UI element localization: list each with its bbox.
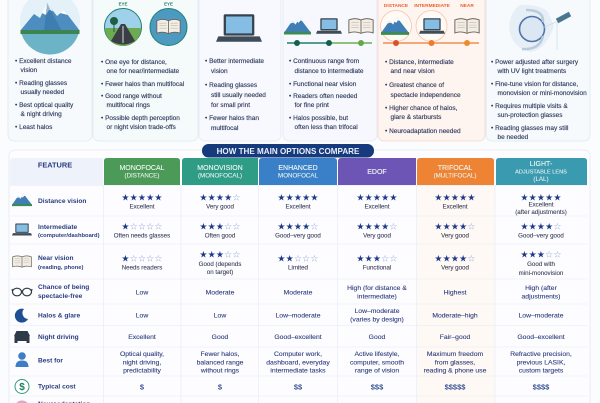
header: enhanced monofocal: ENHANCED	[278, 165, 318, 172]
text: trifocal bullets	[385, 59, 461, 135]
values: High (after	[525, 285, 558, 292]
row label: Night driving	[38, 334, 79, 341]
values: Fewer halos,	[201, 351, 240, 358]
values: $	[218, 382, 223, 392]
text: LAL bullets: • Fine-tune vision for distance,	[491, 81, 578, 88]
ratings: ★★★★☆	[277, 222, 319, 232]
icon: brain	[16, 400, 28, 403]
values	[120, 351, 572, 374]
text: EDOF bullets: for fine print	[294, 102, 329, 109]
ratings	[114, 222, 564, 240]
panel: EDOF	[283, 0, 377, 141]
ratings	[121, 250, 564, 277]
text: monofocal bullets: • Best optical quality	[15, 102, 74, 109]
row label: Distance vision	[38, 198, 86, 205]
values: Good	[212, 334, 229, 341]
values: Good–excellent	[274, 334, 322, 341]
text: LAL bullets: sun-protection glasses	[498, 112, 563, 119]
text: monovision bullets: • One eye for distance,	[101, 59, 167, 66]
label: intermediate: INTERMEDIATE	[414, 3, 451, 9]
panel: light-adjustable lens	[486, 0, 590, 141]
header: feature	[10, 158, 103, 185]
values: balanced range	[197, 360, 244, 366]
text: LAL bullets: be needed	[498, 134, 529, 141]
header: enhanced monofocal	[259, 158, 337, 185]
icon: dollar	[15, 380, 29, 394]
text: EDOF bullets: • Continuous range from	[289, 58, 359, 65]
text: enhanced bullets: still usually needed	[211, 92, 266, 99]
ratings: Good (depends	[199, 261, 241, 268]
values: intermediate)	[357, 294, 397, 300]
header: enhanced monofocal: MONOFOCAL	[278, 172, 318, 180]
header: EDOF: EDOF	[367, 169, 387, 176]
values: reading & phone use	[424, 368, 487, 374]
text: monofocal bullets: vision	[20, 67, 38, 74]
header: light-adjustable: LIGHT-	[530, 161, 553, 168]
text: monofocal bullets: & night driving	[20, 111, 62, 118]
values: $$$$$	[445, 382, 466, 392]
icon: book	[349, 19, 373, 33]
ratings: ★★★★★	[356, 194, 398, 204]
text: enhanced bullets: • Reading glasses	[205, 82, 258, 89]
header: feature: FEATURE	[38, 160, 72, 170]
values: Low–moderate	[355, 308, 400, 315]
header: monofocal: (DISTANCE)	[125, 172, 159, 180]
values: Moderate	[284, 290, 313, 296]
ratings: ★★★★★	[121, 194, 163, 204]
range line	[287, 40, 372, 46]
panel: comparison table	[9, 144, 590, 403]
icon: moon	[15, 309, 28, 323]
header: light-adjustable	[496, 158, 587, 185]
row label: Near vision	[38, 255, 74, 262]
row label: Best for	[38, 358, 63, 364]
ratings: Limited	[288, 264, 309, 272]
text: enhanced bullets: • Better intermediate	[205, 58, 264, 65]
text: LAL bullets: monovision or mini-monovision	[498, 90, 587, 97]
text: EDOF bullets: • Readers often needed	[289, 93, 358, 100]
ratings: mini-monovision	[519, 270, 564, 277]
row label: Intermediate	[38, 224, 78, 231]
text: LAL bullets	[491, 59, 587, 141]
row: best for	[16, 351, 572, 374]
ratings: Excellent	[364, 204, 390, 210]
values: (varies by design)	[350, 316, 404, 324]
ratings: Very good	[441, 264, 469, 272]
ratings: on target)	[207, 269, 233, 276]
icon: open book	[150, 8, 187, 46]
values: Refractive precision,	[510, 351, 572, 358]
label: eye right: EYE	[164, 2, 173, 6]
values: Low	[136, 312, 148, 320]
row label: (reading, phone)	[38, 265, 83, 271]
values	[140, 382, 550, 392]
ratings: Excellent	[442, 204, 468, 210]
ratings: ★★★★☆	[434, 254, 476, 264]
text: monovision bullets: multifocal rings	[106, 102, 151, 109]
values: Moderate	[206, 290, 235, 296]
ratings: ★☆☆☆☆	[121, 254, 163, 264]
row label	[38, 224, 100, 239]
icon: mountain in ring	[380, 10, 412, 42]
values: intermediate tasks	[270, 368, 326, 374]
text: EDOF bullets	[289, 58, 364, 131]
row: near vision	[13, 250, 564, 277]
row: typical cost	[15, 380, 550, 394]
values: Low–moderate	[276, 312, 321, 320]
values: Low	[214, 312, 226, 320]
ratings: Good–very good	[275, 232, 321, 240]
icon: glasses	[12, 288, 32, 296]
ratings: ★★☆☆☆	[277, 254, 319, 264]
values: range of vision	[355, 368, 399, 374]
text: enhanced bullets: vision	[211, 68, 228, 75]
ratings	[121, 194, 567, 216]
values: Highest	[443, 290, 467, 296]
ratings: ★☆☆☆☆	[121, 222, 163, 232]
label: distance: DISTANCE	[384, 3, 409, 9]
values: predictability	[123, 368, 161, 374]
row label: Chance of being	[38, 284, 89, 291]
text: monofocal bullets: usually needed	[20, 89, 65, 96]
values: $$$$	[533, 382, 550, 392]
icon: lens and UV light	[509, 5, 570, 52]
text: monovision bullets: • Good range without	[101, 93, 162, 100]
icon: mountain	[284, 17, 311, 34]
ratings: ★★★★★	[520, 194, 562, 204]
values: from glasses,	[435, 360, 475, 366]
label: eye left: EYE	[119, 2, 127, 6]
text: LAL bullets: • Power adjusted after surgery	[491, 59, 579, 66]
values: Low	[136, 290, 148, 296]
row label	[38, 255, 83, 271]
row label: spectacle-free	[38, 293, 83, 300]
values: Good–excellent	[517, 334, 565, 341]
row label: Typical cost	[38, 384, 76, 390]
text: monovision bullets: • Possible depth perception	[101, 115, 180, 122]
row label: (computer/dashboard)	[38, 233, 100, 239]
range line	[383, 40, 479, 46]
ratings: Very good	[441, 232, 469, 240]
text: trifocal bullets: glare & starbursts	[390, 114, 442, 121]
text: trifocal bullets: and near vision	[390, 68, 435, 75]
ratings: ★★★★★	[277, 194, 319, 204]
text: enhanced bullets: for small print	[211, 102, 250, 109]
text: enhanced bullets: multifocal	[211, 125, 239, 132]
ratings: (after adjustments)	[515, 209, 567, 216]
values: Optical quality,	[120, 351, 164, 358]
values: Computer work,	[274, 351, 322, 358]
label: near: NEAR	[460, 3, 474, 9]
text: trifocal bullets: • Greatest chance of	[385, 82, 444, 89]
text: monofocal bullets: • Reading glasses	[15, 80, 68, 87]
row label	[38, 284, 89, 300]
text: EDOF bullets: often less than trifocal	[294, 124, 358, 131]
text: LAL bullets: • Requires multiple visits &	[491, 103, 568, 110]
header: trifocal	[417, 158, 494, 185]
values	[128, 334, 565, 341]
icon: car	[14, 331, 30, 343]
text: monovision bullets: or night vision trade-offs	[106, 124, 176, 131]
ratings: Excellent	[285, 204, 311, 210]
text: enhanced bullets: • Fewer halos than	[205, 115, 259, 122]
icon: laptop	[12, 224, 32, 236]
icon: laptop in ring	[416, 10, 447, 42]
values: Fair–good	[440, 334, 471, 341]
header: light-adjustable: (LAL)	[533, 176, 549, 183]
ratings: Good–very good	[518, 232, 564, 240]
values: Moderate–high	[432, 312, 478, 320]
values: previous LASIK,	[517, 360, 565, 366]
ratings: Excellent	[528, 202, 554, 208]
values	[136, 285, 560, 300]
row label: Halos & glare	[38, 312, 80, 320]
ratings: ★★★★☆	[434, 222, 476, 232]
text: trifocal bullets: • Distance, intermediate	[385, 59, 454, 66]
values: dashboard, everyday	[266, 360, 330, 366]
header: monofocal	[104, 158, 180, 185]
row: distance vision	[12, 194, 567, 216]
icon: laptop	[216, 14, 262, 42]
text: trifocal bullets: spectacle independence	[390, 92, 461, 99]
title banner	[202, 144, 374, 158]
header: monovision: MONOVISION	[197, 165, 243, 172]
text: monovision bullets: • Fewer halos than multifocal	[101, 81, 185, 88]
row: neuroadaptation	[16, 400, 90, 403]
ratings: Often good	[205, 232, 236, 240]
ratings: ★★★☆☆	[520, 250, 562, 260]
panel: enhanced monofocal	[199, 0, 281, 141]
icon: mountain lake	[20, 0, 80, 55]
panel: trifocal	[378, 0, 485, 141]
icon: book	[455, 19, 479, 33]
ratings: Excellent	[129, 204, 155, 210]
header: EDOF	[338, 158, 416, 185]
ratings: Very good	[363, 232, 391, 240]
grid	[10, 185, 587, 403]
row: halos and glare	[15, 308, 564, 324]
panel: monovision	[93, 0, 198, 141]
text: trifocal bullets: • Neuroadaptation needed	[385, 128, 461, 135]
text: EDOF bullets: distance to intermediate	[294, 68, 364, 75]
values: $$$	[371, 382, 384, 392]
text: monovision bullets: one for near/intermediate	[106, 68, 180, 75]
values: computer, smooth	[350, 360, 404, 366]
ratings: Needs readers	[122, 264, 162, 272]
values: Good	[369, 334, 386, 341]
ratings: Functional	[363, 264, 391, 272]
header: trifocal: (MULTIFOCAL)	[434, 172, 476, 180]
values: custom targets	[519, 368, 564, 374]
icon: road	[104, 8, 142, 46]
row: intermediate	[12, 222, 564, 240]
values: without rings	[200, 368, 240, 374]
ratings: Very good	[206, 204, 234, 210]
ratings: ★★★☆☆	[199, 250, 241, 260]
ratings: ★★★★☆	[199, 194, 241, 204]
header: monovision	[182, 158, 258, 185]
text: LAL bullets: • Reading glasses may still	[491, 125, 569, 132]
text: EDOF bullets: • Functional near vision	[289, 81, 357, 88]
text: EDOF bullets: • Halos possible, but	[289, 115, 348, 122]
ratings: ★★★★★	[434, 194, 476, 204]
text: monofocal bullets	[15, 58, 74, 131]
row: night driving	[14, 331, 565, 343]
header: light-adjustable: ADJUSTABLE LENS	[515, 170, 567, 176]
icon: person	[16, 352, 28, 367]
ratings: Good with	[527, 261, 555, 268]
values: $$	[294, 382, 303, 392]
panel: monofocal	[8, 0, 92, 141]
ratings: Often needs glasses	[114, 232, 170, 240]
row: spectacle-free	[12, 284, 560, 300]
ratings: ★★★★☆	[520, 222, 562, 232]
values: Maximum freedom	[427, 351, 483, 358]
title banner: HOW THE MAIN OPTIONS COMPARE	[217, 147, 360, 156]
values	[136, 308, 564, 324]
trifocal column tint	[417, 185, 495, 403]
icon: mountain	[12, 194, 32, 206]
values: Excellent	[128, 334, 156, 341]
text: monovision bullets	[101, 59, 185, 131]
ratings: ★★★★☆	[356, 222, 398, 232]
text: LAL bullets: with UV light treatments	[496, 68, 567, 75]
text: monofocal bullets: • Least halos	[15, 124, 53, 131]
ratings: ★★★☆☆	[199, 222, 241, 232]
header: trifocal: TRIFOCAL	[438, 165, 472, 172]
values: High (for distance &	[347, 285, 407, 292]
values: Low–moderate	[519, 312, 564, 320]
values: night driving,	[123, 360, 161, 366]
text: monofocal bullets: • Excellent distance	[15, 58, 72, 65]
ratings: ★★★☆☆	[356, 254, 398, 264]
text: enhanced bullets	[205, 58, 266, 132]
icon: dollar: $	[19, 382, 25, 393]
header: monovision: (MONOFOCAL)	[198, 172, 242, 180]
icon: laptop	[316, 18, 342, 34]
icon: book	[13, 256, 31, 267]
header: monofocal: MONOFOCAL	[119, 165, 165, 172]
values: Active lifestyle,	[355, 351, 400, 358]
values: $	[140, 382, 145, 392]
text: trifocal bullets: • Higher chance of halos,	[385, 105, 458, 112]
values: adjustments)	[522, 294, 560, 300]
